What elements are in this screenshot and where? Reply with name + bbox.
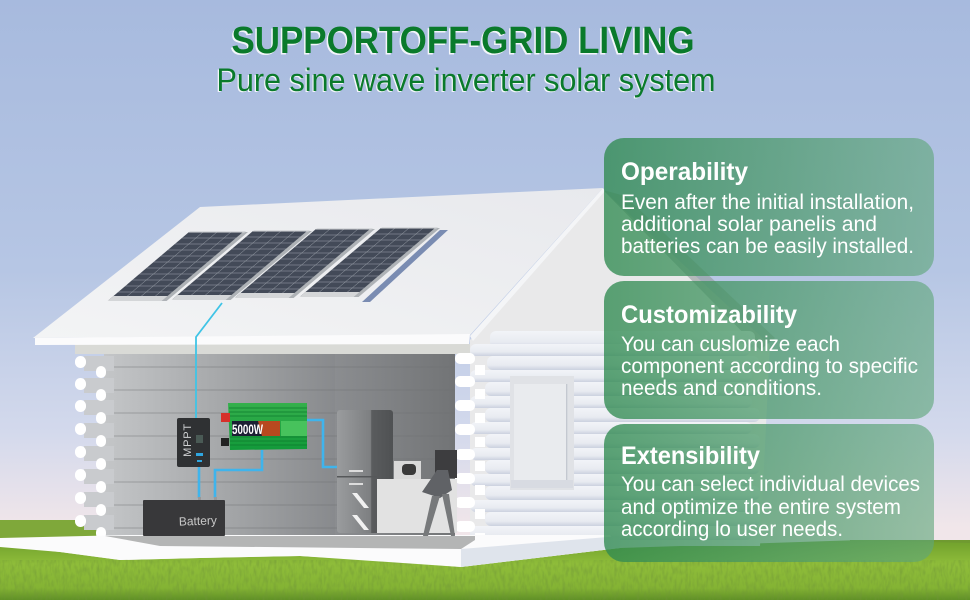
MPPT controller: [177, 418, 210, 467]
title: Pure sine wave inverter solar system: [216, 62, 716, 98]
cables: [199, 420, 337, 498]
solar panels: [108, 227, 441, 301]
panel: Customizability: [604, 281, 934, 419]
inverter 5000W: [221, 403, 307, 450]
foreground lawn: [0, 540, 970, 600]
siding lines: [104, 367, 455, 528]
battery: Battery: [179, 513, 217, 529]
solar panel 4: [300, 227, 441, 297]
panel: Customizability: needs and conditions.: [621, 376, 822, 400]
panel: Operability: Even after the initial installation,: [621, 190, 914, 214]
back wall right: [335, 346, 455, 536]
panel: Operability: Operability: [621, 158, 748, 186]
roof shadow on gable: [603, 190, 775, 350]
panel: Extensibility: and optimize the entire system: [621, 495, 901, 519]
panel: Extensibility: according lo user needs.: [621, 517, 843, 541]
panel: Operability: batteries can be easily installed.: [621, 234, 914, 258]
left log ends: [75, 356, 114, 530]
back wall left: [104, 346, 335, 536]
kitchen cabinet: [377, 479, 457, 533]
window: [510, 376, 574, 490]
house: [75, 190, 775, 546]
solar panel 3: [235, 228, 376, 298]
roof: [33, 188, 605, 345]
heading: SUPPORTOFF-GRID LIVING: [230, 22, 693, 64]
cable: panel to MPPT: [196, 303, 222, 418]
MPPT controller: MPPT: [182, 423, 194, 457]
panel: Customizability: You can cuslomize each: [621, 332, 840, 356]
concrete slab: [0, 535, 620, 567]
inverter 5000W: 5000W: [232, 422, 263, 437]
solar panel 2: [172, 230, 313, 300]
panel: Extensibility: Extensibility: [621, 442, 760, 470]
right log ends: [455, 353, 485, 541]
panel: Customizability: Customizability: [621, 301, 797, 329]
panel: Operability: additional solar panelis and: [621, 212, 877, 236]
left wall column: [96, 366, 106, 539]
solar panel 1: [108, 231, 249, 301]
title: SUPPORTOFF-GRID LIVING: [232, 20, 694, 62]
microwave: [394, 461, 421, 479]
gable wall: [470, 190, 770, 546]
panel: Extensibility: [604, 424, 934, 562]
title: [215, 20, 716, 99]
panel: Operability: [604, 138, 934, 276]
distant grass: [0, 520, 970, 560]
ceiling beams: [75, 344, 470, 354]
tripod device: [422, 450, 457, 536]
panel: Customizability: component according to specific: [621, 354, 918, 378]
panel: Extensibility: You can select individual devices: [621, 472, 920, 496]
battery: [143, 497, 225, 536]
subheading: Pure sine wave inverter solar system: [215, 63, 714, 99]
fridge: [337, 410, 393, 533]
panel shadow: [362, 230, 448, 302]
right wall logs: [470, 331, 760, 540]
